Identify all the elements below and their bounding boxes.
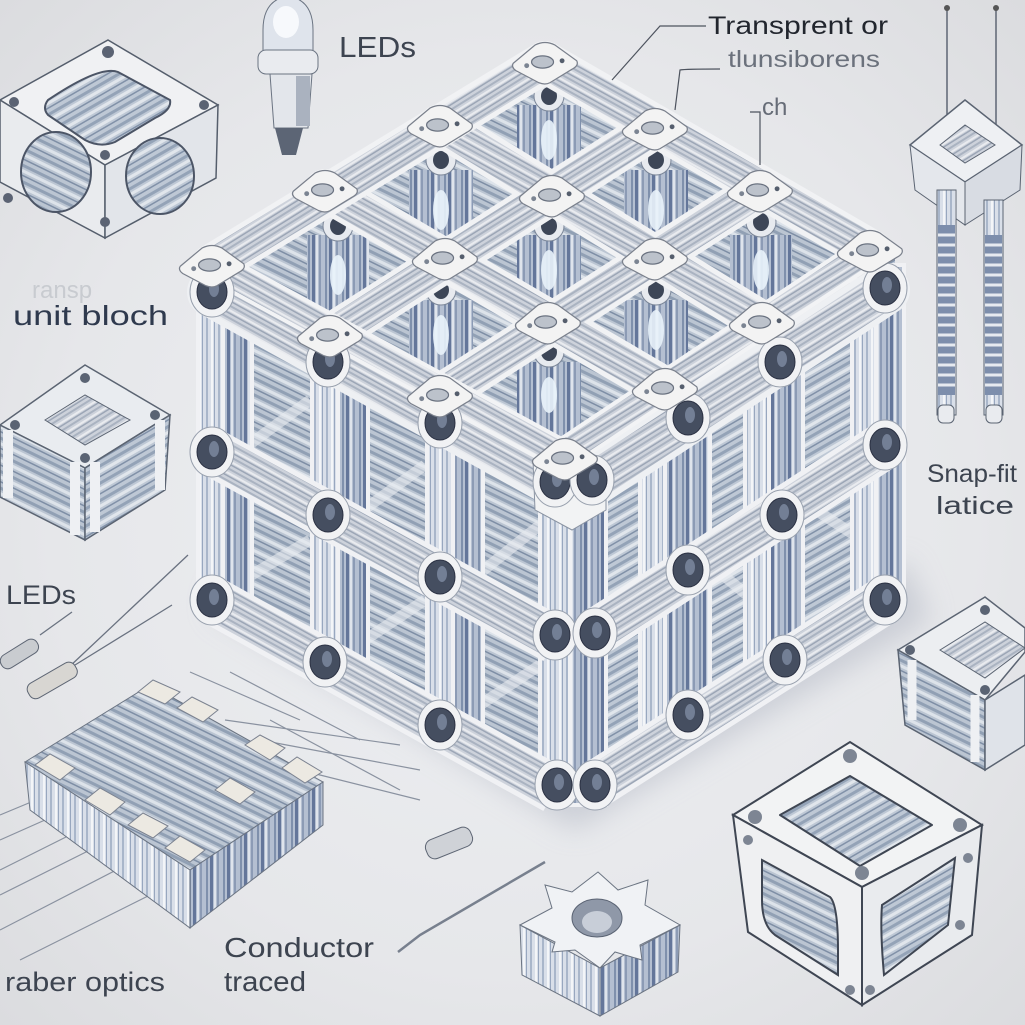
label: fiber optics: raber optics [5,967,165,997]
label: conductor traced [224,932,374,997]
top connector nodes [179,42,902,480]
cube: top-left unit block [0,40,218,238]
fibers [0,672,420,960]
label text: unit bloch [13,300,168,331]
cube: small glass block left [0,365,170,540]
label: LEDs top: LEDs [339,32,416,64]
corner block [533,438,606,530]
top face interior [212,62,885,455]
horizontal beams [212,445,885,790]
icon: LED top [258,0,318,155]
tabs [35,680,322,862]
label: LEDs left: LEDs [6,580,76,610]
cube: right small block [898,597,1025,770]
block front-right [190,782,323,928]
faded label: ransp [32,277,92,304]
callout third line: ch [762,94,787,121]
label: snap-fit lattice [927,460,1017,520]
side connector nodes [190,263,907,810]
block top [25,685,323,870]
interior beams [235,400,870,760]
main lattice block [179,42,930,830]
icon: small LED [423,825,475,861]
callout: transparent or translucent [612,12,888,165]
label: unit block [13,277,168,331]
label line two: traced [224,966,306,997]
glass left face [205,268,570,806]
leader lines [612,26,760,165]
block front-left [25,762,190,928]
icon: LED wires left [0,555,188,701]
label line one: Snap-fit [927,460,1017,488]
label line one: Conductor [224,932,374,963]
icon: snap-fit connector with pins [910,5,1022,423]
label line two: latice [936,492,1014,520]
cube: bottom-right large block [733,742,982,1005]
icon: heatsink [520,872,680,1016]
vertical columns [198,265,904,805]
icon: conductor pin [398,862,545,952]
glass right face [565,258,895,806]
fiber optics bundle [0,672,420,960]
callout second line: tlunsiborens [728,46,880,72]
top grid beams [212,62,885,482]
block shadow [212,560,930,830]
callout text: Transprent or [708,12,888,40]
inner columns [307,81,792,437]
